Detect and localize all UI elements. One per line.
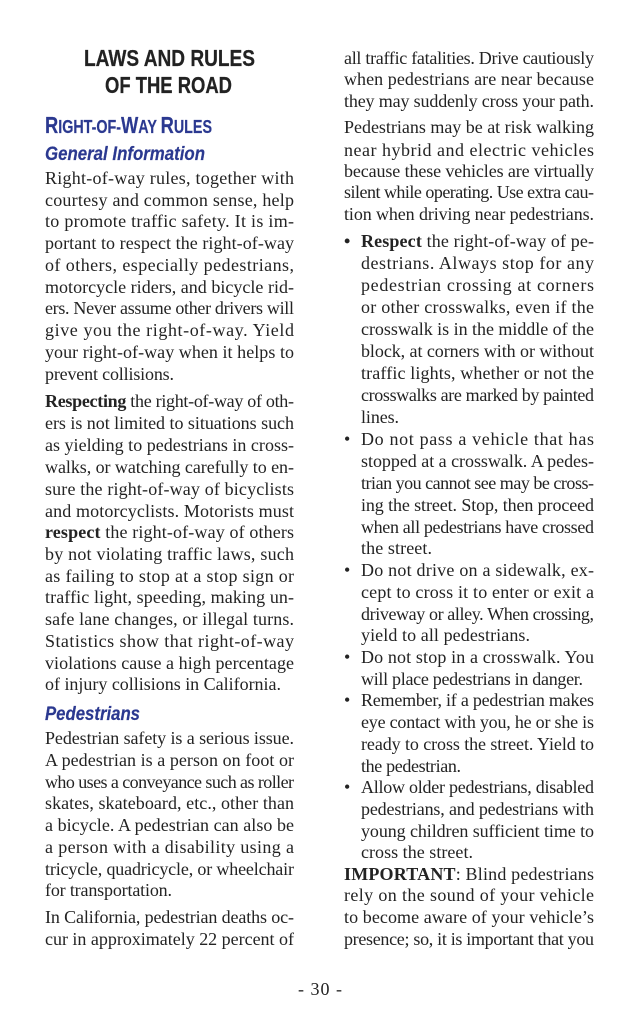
text block: important note: rely on the sound of your vehicle xyxy=(344,885,594,905)
text block: respecting right-of-way: Statistics show that right-of-way xyxy=(45,631,294,651)
subheading: pedestrians: Pedestrians xyxy=(45,703,140,725)
bullet: do not stop in crosswalk: Do not stop in a crosswalk. You xyxy=(361,647,594,667)
text block: important note: to become aware of your vehicle’s xyxy=(344,907,594,927)
subheading: general information: General Information xyxy=(45,143,205,165)
text block: respecting right-of-way: and motorcyclists. Motorists must xyxy=(45,501,294,521)
text block: hybrid and electric vehicles: because these vehicles are virtually xyxy=(344,161,594,181)
text block: right-of-way intro: your right-of-way when it helps to xyxy=(45,342,294,362)
bullet: do not stop in crosswalk: • xyxy=(344,647,350,667)
bullet: do not pass: ing the street. Stop, then proceed xyxy=(361,495,594,515)
text block: respecting right-of-way: as failing to stop at a stop sign or xyxy=(45,566,294,586)
bullet: eye contact: ready to cross the street. Yield to xyxy=(361,734,594,754)
bullet: do not pass xyxy=(344,429,594,558)
text block: pedestrian definition: Pedestrian safety is a serious issue. xyxy=(45,728,294,748)
bullet: eye contact xyxy=(344,690,594,776)
text block: right-of-way intro: to promote traffic safety. It is im- xyxy=(45,211,294,231)
bullet: older pedestrians: pedestrians, and pedestrians with xyxy=(361,799,594,819)
bullet: respect right-of-way xyxy=(344,231,594,427)
bullet: respect right-of-way: block, at corners with or without xyxy=(361,341,594,361)
bullet: respect right-of-way: crosswalk is in the middle of the xyxy=(361,319,594,339)
text block: right-of-way intro: ers. Never assume other drivers will xyxy=(45,298,294,318)
bullet: do not pass: Do not pass a vehicle that has xyxy=(361,429,594,449)
bullet: sidewalk: cept to cross it to enter or exit a xyxy=(361,582,594,602)
bullet: older pedestrians: • xyxy=(344,777,350,797)
text block: pedestrian definition: tricycle, quadricycle, or wheelchair xyxy=(45,859,294,879)
text block: pedestrian definition: for transportation. xyxy=(45,880,172,900)
bullet: sidewalk: driveway or alley. When crossing, xyxy=(361,604,594,624)
text block: pedestrian definition: a person with a disability using a xyxy=(45,837,294,857)
bullet: eye contact: Remember, if a pedestrian makes xyxy=(361,690,594,710)
bullet: eye contact: • xyxy=(344,690,350,710)
text block: pedestrian deaths xyxy=(45,48,594,949)
bullet: older pedestrians xyxy=(344,777,594,862)
bullet: do not pass: stopped at a crosswalk. A pedes- xyxy=(361,451,594,471)
text block: right-of-way intro: prevent collisions. xyxy=(45,364,174,384)
text block: right-of-way intro: motorcycle riders, and bicycle rid- xyxy=(45,277,294,297)
text block: hybrid and electric vehicles: tion when driving near pedestrians. xyxy=(344,204,594,224)
title xyxy=(84,45,255,98)
text block: respecting right-of-way: sure the right-of-way of bicyclists xyxy=(45,479,294,499)
bullet: respect right-of-way: or other crosswalks, even if the xyxy=(361,297,594,317)
text block: important note xyxy=(344,864,594,949)
text block: right-of-way intro xyxy=(45,168,294,384)
bullet: respect right-of-way: pedestrian crossing at corners xyxy=(361,275,594,295)
bullet: older pedestrians: Allow older pedestrians, disabled xyxy=(361,777,594,797)
bullet: sidewalk: Do not drive on a sidewalk, ex- xyxy=(361,560,594,580)
bullet: do not pass: the street. xyxy=(361,538,432,558)
bullet: older pedestrians: cross the street. xyxy=(361,842,473,862)
bullet: sidewalk: • xyxy=(344,560,350,580)
text block: important note: presence; so, it is important that you xyxy=(344,929,594,949)
bullet: do not stop in crosswalk xyxy=(344,647,594,689)
page number: - 30 - xyxy=(298,979,342,999)
text block: right-of-way intro: give you the right-of-way. Yield xyxy=(45,320,294,340)
bullet: respect right-of-way: lines. xyxy=(361,407,399,427)
text block: pedestrian deaths: all traffic fatalities. Drive cautiously xyxy=(344,48,594,68)
text block: pedestrian deaths: they may suddenly cross your path. xyxy=(344,91,594,111)
bullet: sidewalk: yield to all pedestrians. xyxy=(361,625,530,645)
text block: respecting right-of-way: ers is not limited to situations such xyxy=(45,413,294,433)
text block: respecting right-of-way: respect the right-of-way of others xyxy=(45,522,294,542)
text block: respecting right-of-way xyxy=(45,391,294,694)
text block: right-of-way intro: courtesy and common sense, help xyxy=(45,190,294,210)
text block: right-of-way intro: portant to respect the right-of-way xyxy=(45,233,294,253)
bullet: respect right-of-way: traffic lights, whether or not the xyxy=(361,363,594,383)
text block: respecting right-of-way: safe lane changes, or illegal turns. xyxy=(45,609,294,629)
text block: right-of-way intro: of others, especially pedestrians, xyxy=(45,255,294,275)
bullet: do not pass: trian you cannot see may be cross- xyxy=(361,473,594,493)
bullet: do not pass: when all pedestrians have crossed xyxy=(361,517,594,537)
text block: hybrid and electric vehicles: near hybrid and electric vehicles xyxy=(344,140,594,160)
text block: pedestrian definition: A pedestrian is a person on foot or xyxy=(45,750,294,770)
text block: pedestrian definition xyxy=(45,728,294,900)
text block: respecting right-of-way: as yielding to pedestrians in cross- xyxy=(45,435,294,455)
text block: hybrid and electric vehicles: silent while operating. Use extra cau- xyxy=(344,182,594,202)
text block: pedestrian deaths: cur in approximately 22 percent of xyxy=(45,929,294,949)
text block: pedestrian deaths: In California, pedestrian deaths oc- xyxy=(45,907,294,927)
text block: pedestrian definition: a bicycle. A pedestrian can also be xyxy=(45,815,294,835)
heading: right-of-way rules: RIGHT-OF-WAY RULES xyxy=(45,112,212,138)
text block: respecting right-of-way: walks, or watching carefully to en- xyxy=(45,457,294,477)
text block: respecting right-of-way: traffic light, speeding, making un- xyxy=(45,587,294,607)
bullet: older pedestrians: young children sufficient time to xyxy=(361,821,594,841)
title: OF THE ROAD xyxy=(105,72,232,98)
bullet: respect right-of-way: crosswalks are marked by painted xyxy=(361,385,594,405)
bullet: eye contact: the pedestrian. xyxy=(361,756,461,776)
title: LAWS AND RULES xyxy=(84,45,255,71)
text block: respecting right-of-way: by not violating traffic laws, such xyxy=(45,544,294,564)
bullet: respect right-of-way: Respect the right-of-way of pe- xyxy=(361,231,594,251)
text block: respecting right-of-way: Respecting the right-of-way of oth- xyxy=(45,391,294,411)
text block: hybrid and electric vehicles xyxy=(344,117,594,224)
bullet: do not stop in crosswalk: will place pedestrians in danger. xyxy=(361,669,583,689)
text block: pedestrian definition: skates, skateboard, etc., other than xyxy=(45,793,294,813)
bullet: eye contact: eye contact with you, he or she is xyxy=(361,712,594,732)
text block: respecting right-of-way: of injury collisions in California. xyxy=(45,674,281,694)
text block: right-of-way intro: Right-of-way rules, together with xyxy=(45,168,294,188)
text block: important note: IMPORTANT: Blind pedestrians xyxy=(344,864,594,884)
bullet: do not pass: • xyxy=(344,429,350,449)
text block: respecting right-of-way: violations cause a high percentage xyxy=(45,653,294,673)
text block: pedestrian definition: who uses a conveyance such as roller xyxy=(45,772,294,792)
bullet: sidewalk xyxy=(344,560,594,645)
text block: hybrid and electric vehicles: Pedestrians may be at risk walking xyxy=(344,117,594,137)
bullet: respect right-of-way: • xyxy=(344,231,350,251)
text block: pedestrian deaths: when pedestrians are near because xyxy=(344,69,594,89)
bullet: respect right-of-way: destrians. Always stop for any xyxy=(361,253,594,273)
